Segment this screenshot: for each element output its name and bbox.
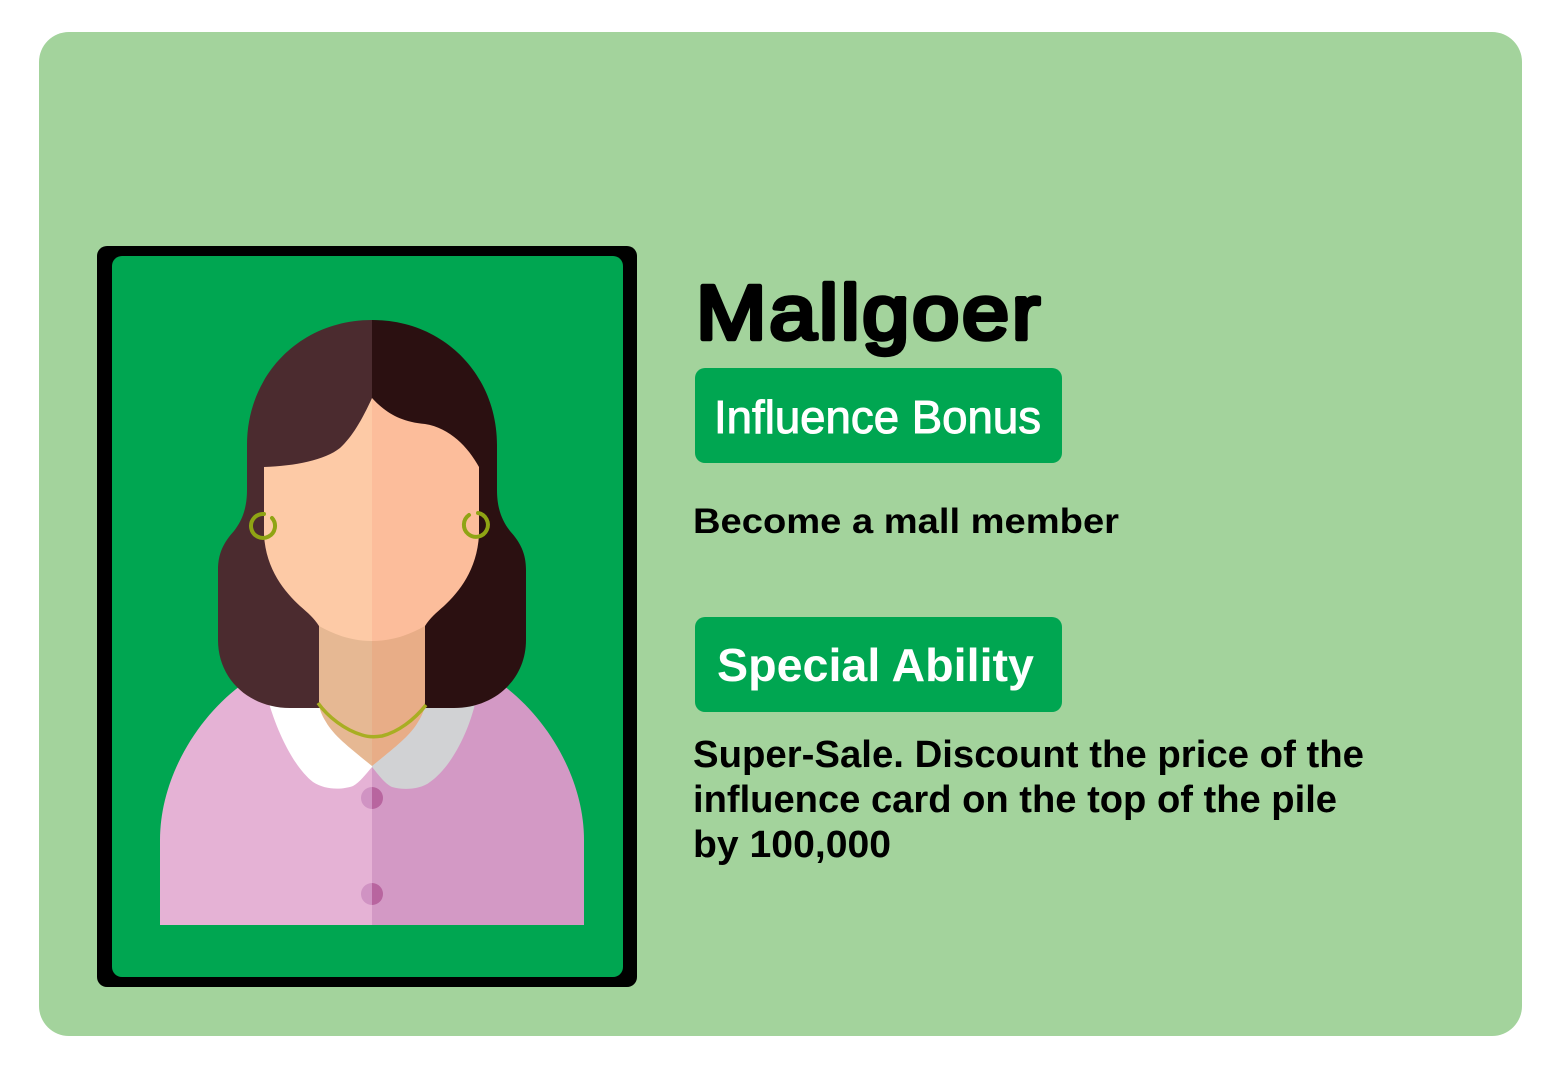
text: special ability description [693, 734, 1364, 866]
face [264, 398, 479, 641]
hair [218, 320, 526, 708]
button bottom [361, 883, 383, 905]
necklace [318, 703, 426, 737]
badge: influence bonus: Influence Bonus [714, 391, 1041, 443]
text: special ability description: influence card on the top of the pile [693, 779, 1337, 821]
neck [319, 600, 425, 766]
collar [268, 700, 476, 789]
text: special ability description: by 100,000 [693, 824, 891, 866]
badge: influence bonus [695, 368, 1062, 463]
title: Mallgoer [696, 271, 1043, 356]
badge: special ability [695, 617, 1062, 712]
earring right [464, 513, 488, 537]
button top [361, 787, 383, 809]
body: pink blouse [160, 686, 584, 925]
badge: special ability: Special Ability [717, 639, 1034, 691]
earring left [251, 514, 275, 538]
portrait background [112, 256, 623, 977]
portrait frame [97, 246, 637, 987]
text: influence bonus description: Become a mall member [693, 502, 1119, 541]
text: special ability description: Super-Sale. Discount the price of the [693, 734, 1364, 776]
